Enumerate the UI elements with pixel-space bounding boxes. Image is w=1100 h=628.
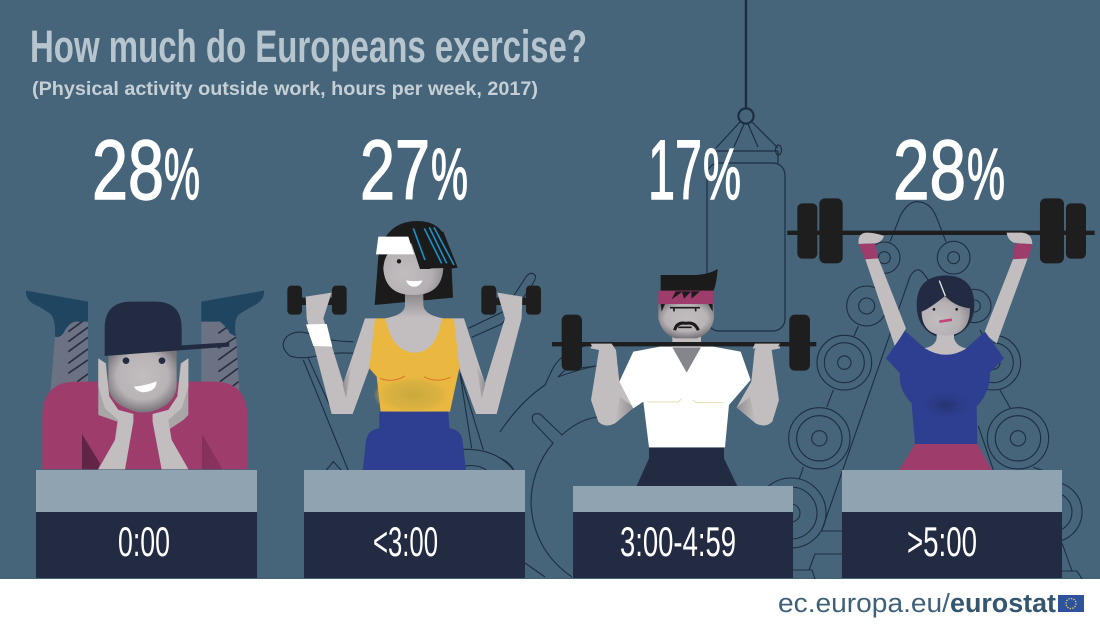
title: How much do Europeans exercise? [30, 21, 587, 72]
percentage: under 3 hours: 27 [360, 123, 430, 217]
tank top texture [373, 375, 453, 415]
footer band [0, 579, 1100, 628]
eyes [933, 308, 935, 311]
panel: under 3 hours plinth [304, 470, 525, 578]
t-shirt [619, 347, 751, 447]
face [108, 350, 177, 412]
arms [865, 258, 906, 347]
bust lines [380, 376, 451, 380]
barbell [787, 231, 1095, 235]
percentage: over 5 hours: % [967, 135, 1005, 215]
arms [306, 293, 377, 414]
hair [375, 221, 458, 305]
barbell [552, 342, 816, 346]
tank top [369, 318, 459, 412]
face [658, 303, 714, 338]
neck and chest [385, 292, 443, 357]
hair [917, 275, 974, 337]
panel: 3 to 5 hours plinth [573, 486, 793, 578]
dumbbells [302, 298, 527, 305]
chest creases [647, 399, 723, 403]
fingers over bar [591, 344, 780, 349]
arm shadows [343, 363, 352, 398]
sweater [42, 382, 247, 469]
smile [406, 280, 423, 287]
gym equipment line art: kettlebell [500, 345, 618, 577]
leg hatching [68, 317, 239, 388]
mouth [939, 320, 952, 322]
gym equipment line art: weight machine pulleys [789, 202, 1049, 531]
skirt [363, 412, 466, 471]
t-shirt shading [914, 387, 977, 423]
chest hair [672, 347, 701, 373]
percentage: over 5 hours: 28 [893, 123, 966, 217]
cap [105, 302, 229, 356]
t-shirt [886, 331, 1004, 444]
gym equipment line art: lower pulleys and frame [756, 478, 1082, 579]
percentage: 0 hours: % [164, 135, 200, 215]
hands and wristbands [859, 233, 1032, 245]
time label: 3:00-4:59: 3:00-4:59 [620, 518, 736, 565]
panel: 0 hours plinth [36, 470, 257, 578]
headband [376, 237, 414, 254]
neck [672, 335, 701, 348]
figure: man with barbell on shoulders, 3 to 5 hours [552, 269, 816, 486]
shoes [26, 291, 88, 337]
face [383, 243, 443, 295]
percentage: 0 hours: 28 [92, 123, 164, 217]
headband [658, 291, 714, 304]
figure: woman with dumbbells, under 3 hours [287, 221, 541, 471]
time label: 0:00: 0:00 [118, 518, 170, 565]
arm shading [615, 397, 634, 423]
face [922, 296, 970, 336]
hair parting [939, 281, 945, 296]
neck [923, 332, 967, 360]
subtitle: (Physical activity outside work, hours per week, 2017) [32, 78, 538, 100]
percentage: 3 to 5 hours: % [703, 135, 741, 215]
skirt [899, 444, 992, 470]
hair [661, 269, 718, 292]
figure: woman lifting barbell overhead, over 5 hours [787, 198, 1095, 470]
fringe [408, 232, 458, 269]
hands [98, 358, 133, 469]
icon: EU flag [1058, 595, 1084, 612]
eye [397, 259, 401, 263]
sweater folds [82, 434, 223, 469]
blue hair streaks [413, 227, 454, 265]
footer: eurostat url: ec.europa.eu/ eurostat [778, 590, 1057, 618]
headband hair spikes [672, 291, 700, 299]
sideburns [661, 304, 713, 312]
figure: man resting head on hands, 0 hours [26, 291, 264, 469]
trousers [637, 448, 737, 486]
brows and eyes [670, 308, 700, 311]
legs [50, 321, 240, 400]
panel: over 5 hours plinth [842, 470, 1062, 578]
time label: under 3:00: <3:00 [373, 518, 438, 565]
smile [134, 381, 157, 392]
arms [591, 344, 634, 425]
percentage: under 3 hours: % [431, 135, 468, 215]
wristband [306, 324, 332, 347]
eyes [123, 357, 129, 364]
icon: hanging punching bag [707, 0, 785, 331]
lip [678, 325, 692, 330]
moustache [675, 323, 698, 330]
time label: over 5:00: >5:00 [907, 518, 977, 565]
percentage: 3 to 5 hours: 17 [648, 123, 702, 217]
gym equipment line art: exercise bike [283, 273, 536, 471]
